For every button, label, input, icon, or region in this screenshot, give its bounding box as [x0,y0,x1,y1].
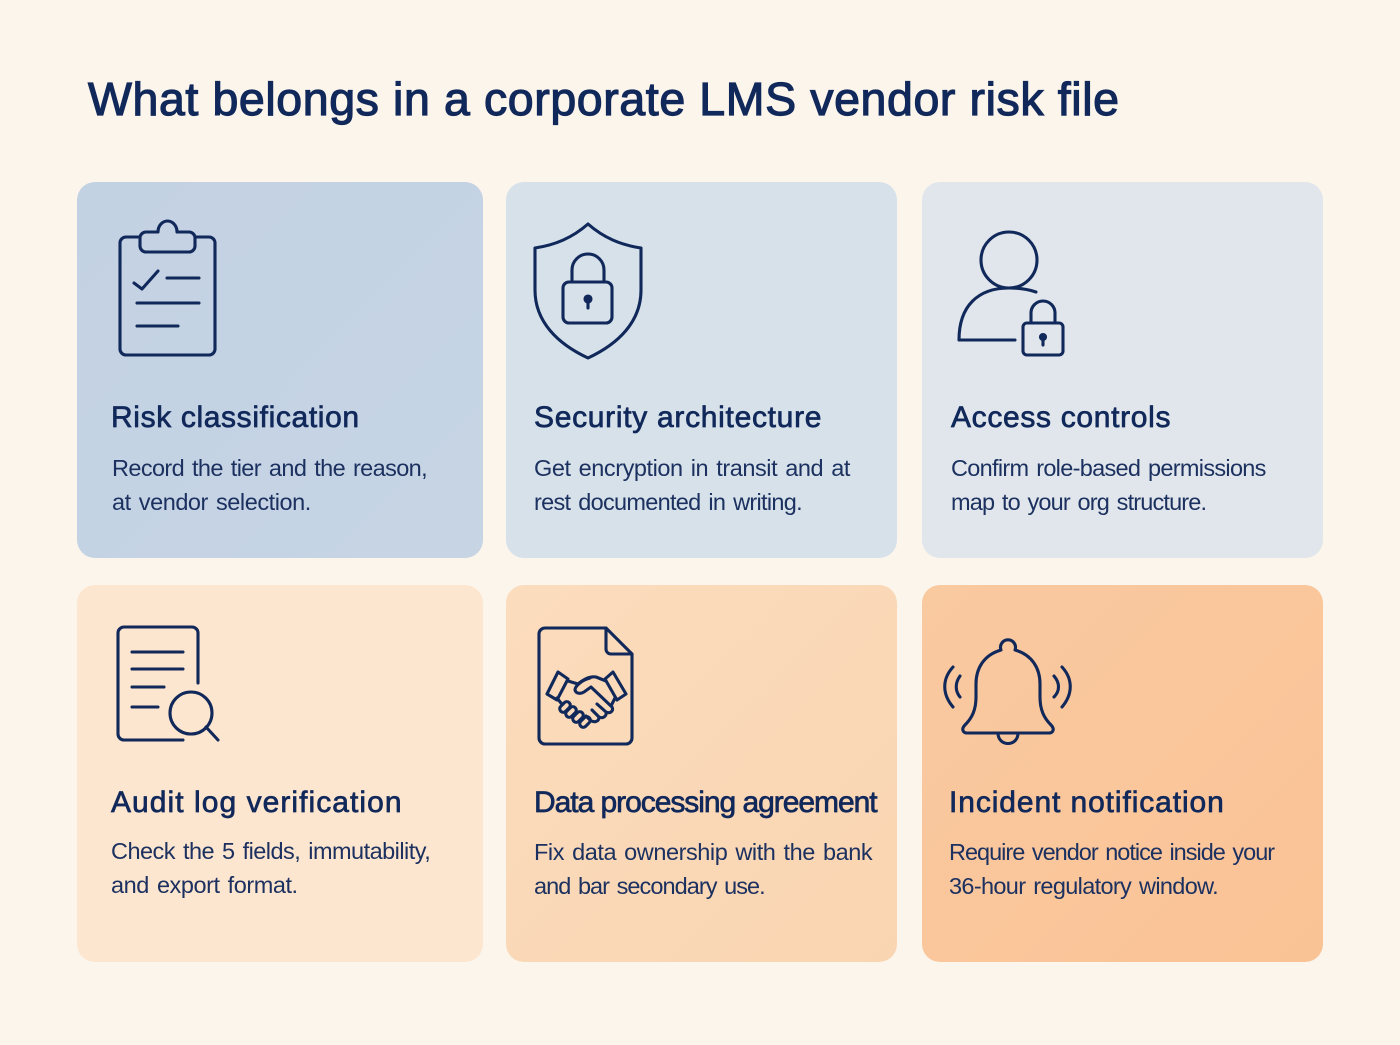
panel: data processing agreement [506,585,897,962]
icon: ringing bell [945,640,1070,744]
text: incident notification [949,839,1275,899]
heading: data processing agreement: Data processing agreement [534,786,877,819]
icon: document with magnifier [118,627,218,740]
heading: incident notification: Incident notification [949,786,1225,819]
heading: security architecture: Security architecture [534,401,822,434]
text: audit log verification: and export format. [111,872,298,898]
text: audit log verification: Check the 5 fields, immutability, [111,838,430,864]
icon: shield with padlock [535,224,641,358]
icon: contract with handshake [539,628,632,744]
text: access controls: Confirm role-based permissions [951,455,1266,481]
text: access controls: map to your org structure. [951,489,1206,515]
text: access controls [951,455,1266,515]
panel: incident notification [922,585,1323,962]
panel: access controls [922,182,1323,558]
title: What belongs in a corporate LMS vendor risk file [88,73,1120,125]
text: risk classification: at vendor selection. [112,489,311,515]
text: data processing agreement: and bar secondary use. [534,873,765,899]
icon: person with padlock [959,232,1063,355]
text: risk classification: Record the tier and the reason, [112,455,427,481]
panel: security architecture [506,182,897,558]
text: incident notification: Require vendor notice inside your [949,839,1274,865]
text: data processing agreement: Fix data ownership with the bank [534,839,872,865]
heading: audit log verification: Audit log verification [111,786,403,819]
text: data processing agreement [534,839,873,899]
heading: access controls: Access controls [951,401,1171,434]
text: risk classification [112,455,427,515]
heading: risk classification: Risk classification [111,401,360,434]
panel: audit log verification [77,585,483,962]
text: security architecture [534,455,850,515]
icon: clipboard checklist [120,221,215,355]
text: security architecture: rest documented in writing. [534,489,802,515]
text: audit log verification [111,838,430,898]
panel: risk classification [77,182,483,558]
text: incident notification: 36-hour regulatory window. [949,873,1218,899]
text: security architecture: Get encryption in transit and at [534,455,850,481]
